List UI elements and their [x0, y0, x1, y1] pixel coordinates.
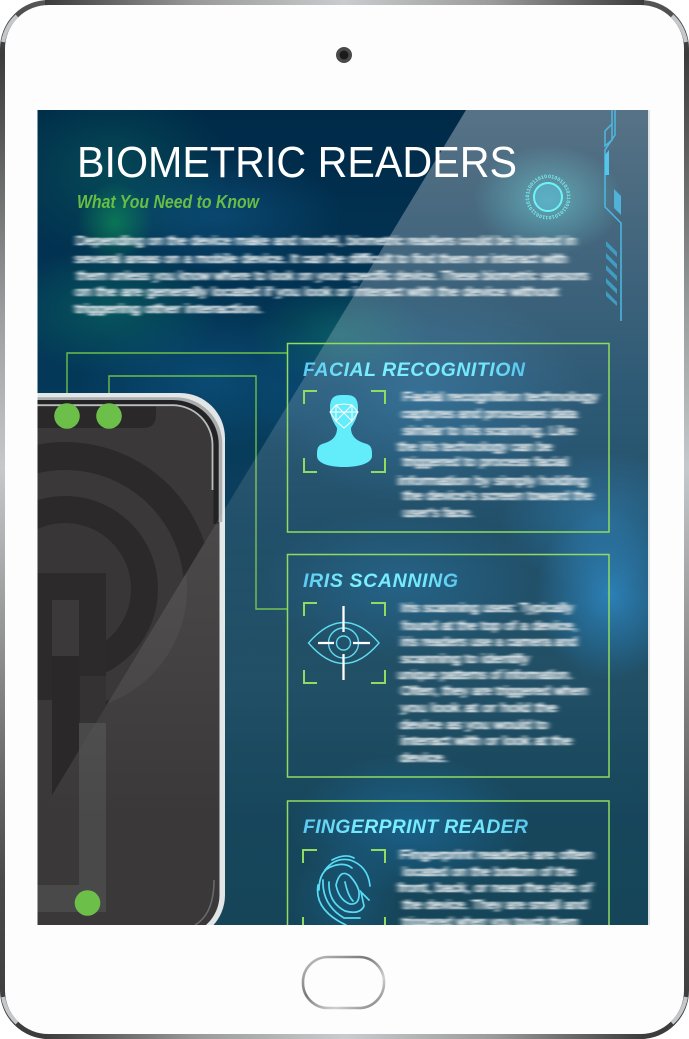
panel: fingerprint reader [286, 800, 610, 925]
description: Fingerprint readers are often [400, 847, 593, 862]
description: you look at or hold the [401, 700, 557, 715]
description [398, 847, 593, 929]
icon: face scan [304, 391, 385, 472]
heading: FINGERPRINT READER [303, 816, 528, 838]
description: located on the bottom of the [403, 864, 575, 879]
description: the device's screen toward the [403, 488, 593, 503]
description: information by simply holding [398, 473, 587, 488]
sensor dot: top left [54, 403, 80, 429]
description: Facial recognition technology [403, 389, 599, 404]
concentric arcs and fingerprint shape [38, 442, 204, 795]
description: iris readers use a camera and [401, 634, 577, 649]
description [398, 600, 587, 765]
screen edge strip [648, 110, 650, 925]
decorative HUD lines [605, 110, 621, 321]
icon: eye scan [304, 603, 385, 683]
reflected ring [0, 467, 187, 711]
lower bar [37, 723, 106, 912]
sensor dot: bottom [75, 890, 100, 916]
description: Often, they are triggered when [401, 683, 587, 698]
camera [336, 47, 352, 63]
title: BIOMETRIC READERS [77, 138, 517, 187]
description: triggered when you touch them [402, 914, 578, 929]
subtitle: What You Need to Know [77, 192, 260, 212]
description: front, back, or near the side of [398, 880, 592, 895]
description: the iris technology can be [398, 439, 552, 454]
heading: IRIS SCANNING [303, 570, 458, 592]
description [398, 389, 599, 520]
intro paragraph: on the are generally located if you look or interact with the device without [75, 284, 558, 299]
screen reflection [130, 110, 648, 694]
description: scanning to identify [401, 651, 530, 666]
phone illustration [38, 393, 225, 925]
description: user's face. [403, 505, 473, 520]
description: triggered to process facial [403, 454, 568, 469]
description: similar to iris scanning. Like [403, 423, 575, 438]
intro paragraph: them unless you know where to look on your specific device. These biometric sensors [77, 268, 589, 283]
sensor dot: top right [96, 403, 122, 429]
icon: binary circle: 0100110101100110101011001101010110011010 [526, 174, 570, 220]
icon: fingerprint [302, 849, 386, 925]
description: captures and processes data [402, 406, 578, 421]
notch [37, 406, 156, 428]
intro paragraph: several areas on a mobile device. It can be difficult to find them or interact with [75, 251, 567, 266]
description: Iris scanning uses: Typically [401, 600, 574, 615]
intro paragraph [75, 233, 589, 316]
connector lines [66, 352, 287, 610]
description: interact with or look at the [401, 733, 572, 748]
panel: iris scanning [288, 554, 609, 777]
description: the device. They are small and [403, 897, 587, 912]
description: device. [400, 750, 447, 765]
tablet screen: infographic [38, 110, 648, 925]
description: unique patterns of information. [398, 667, 572, 682]
intro paragraph: triggering other interaction. [75, 301, 262, 316]
home button [303, 957, 384, 1008]
intro paragraph: Depending on the device make and model, biometric readers could be located in [76, 233, 576, 248]
description: found at the top of a device, [402, 618, 577, 633]
description: device as you would to [400, 717, 548, 732]
panel: facial recognition [288, 344, 609, 532]
heading: FACIAL RECOGNITION [303, 359, 526, 381]
